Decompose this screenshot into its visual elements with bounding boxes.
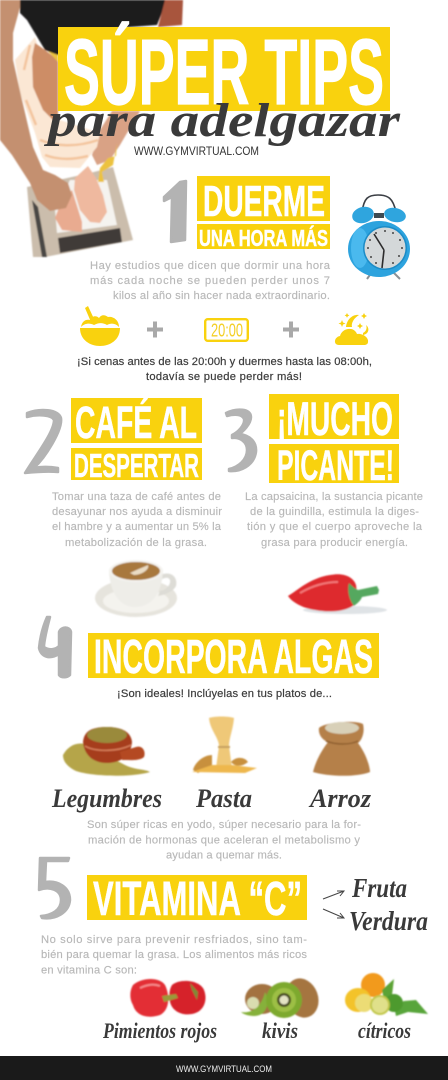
arrow: to verdura [323,909,344,918]
label: pimientos rojos: Pimientos rojos [102,1018,217,1043]
text: coffee paragraph: el hambre y a aumentar un 5% la [52,521,222,533]
panel: tip 3 [226,392,423,614]
icon: moon and cloud [335,313,368,345]
text: sleep paragraph: kilos al año sin hacer nada extraordinario. [113,290,330,302]
heading: café al despertar [71,397,202,484]
text: sleep paragraph: más cada noche se pueden perder unos 7 [90,275,330,287]
text: iodine paragraph: Son súper ricas en yodo, súper necesario para la for- [87,819,361,831]
number 3 [226,410,256,471]
heading: vitamina c: VITAMINA “C” [93,873,302,926]
label: fruta: Fruta [351,873,407,903]
title [43,20,402,158]
icon: digital clock 20:00 [205,319,248,341]
panel: tip 5 [39,858,428,1043]
text: iodine paragraph [87,819,361,862]
image: legumes [63,727,150,776]
text: chili paragraph: La capsaicina, la sustancia picante [245,491,423,503]
image: red chili pepper [288,574,387,614]
number 5 [39,858,70,918]
title: WWW.GYMVIRTUAL.COM [134,146,259,158]
panel: tip 4 [39,617,379,862]
callout: dinner tip: todavía se puede perder más! [146,371,302,383]
label: pasta: Pasta [195,784,252,813]
footer: WWW.GYMVIRTUAL.COM [176,1064,272,1074]
text: chili paragraph: grasa para producir energía. [261,537,408,549]
text: ideal note: ¡Son ideales! Inclúyelas en tus platos de... [117,688,332,700]
label: kivis: kivis [262,1018,298,1043]
image: citrus fruits [345,973,428,1016]
text: chili paragraph: tión y que el cuerpo aproveche la [247,521,423,533]
label: citricos: cítricos [358,1018,411,1043]
heading: café al despertar: DESPERTAR [74,447,199,484]
callout: dinner tip [77,356,372,383]
panel: tip 2 [25,397,222,617]
text: vitamin paragraph: No solo sirve para prevenir resfriados, sino tam- [41,934,307,946]
text: coffee paragraph: desayunar nos ayuda a disminuir [52,506,222,518]
text: coffee paragraph: metabolización de la grasa. [65,537,207,549]
number 1 [164,181,186,242]
heading: vitamina c [87,873,307,926]
heading: duerme una hora más [197,176,330,251]
heading: mucho picante [269,392,399,490]
photo: woman on a scale [0,0,183,257]
image: kiwis [241,974,324,1022]
number 2 [25,410,61,473]
text: sleep paragraph: Hay estudios que dicen que dormir una hora [90,260,331,272]
image: coffee cup [95,560,177,617]
text: vitamin paragraph [41,934,307,976]
text: coffee paragraph [52,491,222,549]
callout: dinner tip: ¡Si cenas antes de las 20:00h y duermes hasta las 08:00h, [77,356,372,368]
heading: duerme una hora más: DUERME [203,177,325,226]
image: rice sack [313,722,370,776]
icon: digital clock 20:00: 20:00 [211,320,243,340]
label: legumbres: Legumbres [51,784,162,813]
number 4 [39,617,71,677]
text: chili paragraph: de la guindilla, estimula la diges- [250,506,419,518]
heading: duerme una hora más: UNA HORA MÁS [199,224,328,251]
icon: plus [283,322,299,338]
panel: tip 1 [77,176,410,383]
image: pasta [192,716,257,773]
text: chili paragraph [245,491,423,549]
text: sleep paragraph [90,260,331,302]
text: vitamin paragraph: en vitamina C son: [41,964,137,976]
image: red peppers [130,979,206,1017]
text: vitamin paragraph: bién para quemar la grasa. Los alimentos más ricos [41,949,307,961]
icon: bowl [80,306,120,346]
arrow: to fruta [323,891,344,899]
title: para adelgazar [43,94,402,147]
label: verdura: Verdura [349,906,428,936]
icon: plus [147,322,163,338]
label: arroz: Arroz [308,784,372,813]
text: iodine paragraph: mación de hormonas que aceleran el metabolismo y [88,834,360,846]
icon: alarm clock [348,195,410,279]
heading: café al despertar: CAFÉ AL [75,397,197,448]
text: iodine paragraph: ayudan a quemar más. [166,850,282,862]
text: coffee paragraph: Tomar una taza de café antes de [52,491,221,503]
footer [0,1056,448,1080]
